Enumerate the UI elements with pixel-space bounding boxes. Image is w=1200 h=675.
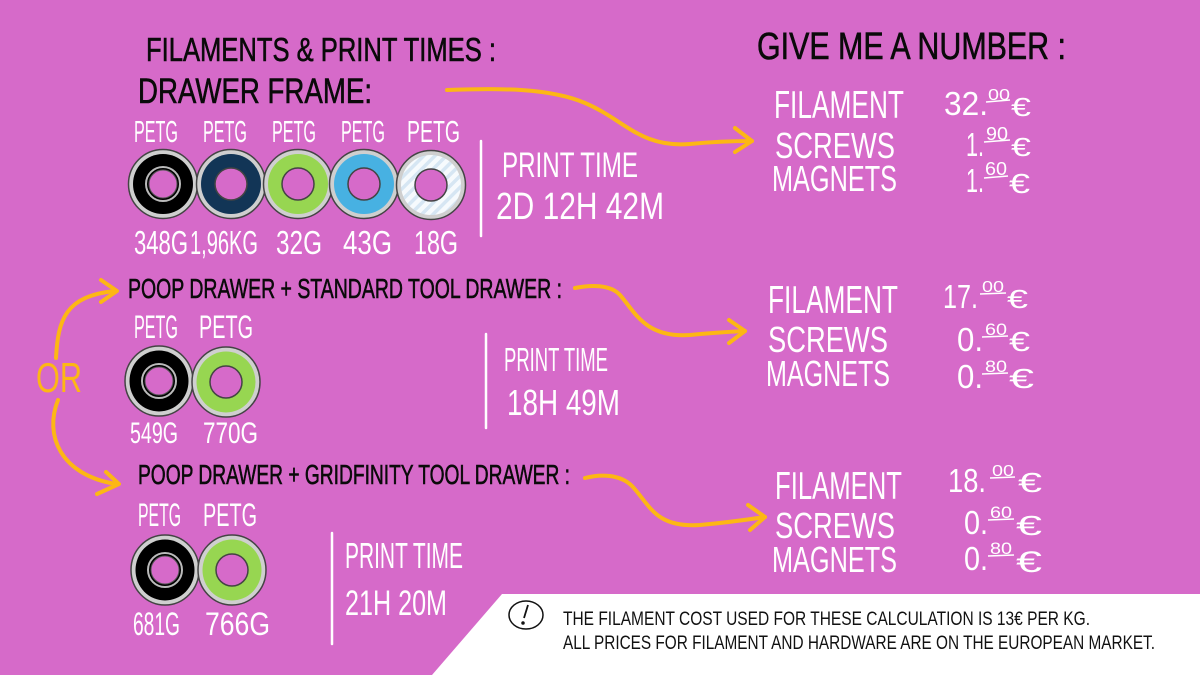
cost values [943,278,1035,395]
arrow: gridfinity drawer to costs [585,476,765,530]
cost values: 60 [985,159,1007,179]
print time: 2D 12H 42M [496,186,664,228]
print time: PRINT TIME [504,341,608,378]
filament spools [131,535,266,605]
panel: standard tool drawer [125,273,620,450]
cost values: € [1011,92,1032,122]
cost values: 17. [943,278,978,315]
divider [331,533,333,644]
filament weights: 681G [133,606,180,642]
OR choice [36,280,119,494]
arrow: to gridfinity tool drawer [53,400,119,494]
print time: PRINT TIME [345,535,463,576]
material labels: PETG [203,497,257,533]
cost values: € [1009,363,1035,394]
cost values: 00 [988,87,1010,104]
cost values: 00 [992,463,1014,480]
material labels: PETG [272,114,316,149]
cost values: 0. [957,358,983,395]
cost values: € [1016,510,1043,541]
material labels [134,114,460,149]
material labels: PETG [203,114,247,149]
cost labels: SCREWS [775,125,895,166]
cost labels: MAGNETS [766,353,890,394]
cost values: € [1009,326,1031,357]
filament weights: 18G [414,224,458,261]
filament spools [128,150,466,220]
heading: standard tool drawer: POOP DRAWER + STANDARD TOOL DRAWER : [128,273,562,304]
print time [345,535,463,623]
cost labels [766,279,898,394]
filament weights: 43G [343,224,392,261]
cost values: 00 [982,279,1004,296]
panel: drawer frame [128,72,664,261]
cost values: 0. [964,540,988,577]
panel: standard drawer costs [766,278,1035,395]
cost labels: FILAMENT [768,279,898,322]
filament weights [133,606,270,642]
divider [485,334,487,428]
cost values: € [1011,132,1032,162]
cost labels: FILAMENT [775,465,902,508]
cost labels [772,84,904,199]
filament spools [125,346,260,417]
cost values: 1. [966,162,984,199]
footnote text: THE FILAMENT COST USED FOR THESE CALCULATION IS 13€ PER KG. [563,609,1090,630]
print time: 18H 49M [507,382,620,423]
filament weights: 549G [130,417,178,450]
arrow: to standard tool drawer [56,280,117,358]
heading: gridfinity tool drawer: POOP DRAWER + GRIDFINITY TOOL DRAWER : [138,459,570,490]
print time: PRINT TIME [502,146,638,185]
heading: drawer frame: DRAWER FRAME: [138,72,372,111]
cost values: € [1018,467,1043,498]
material labels: PETG [134,309,178,345]
icon: exclamation mark [509,601,543,629]
material labels: PETG [199,309,253,345]
filament weights: 32G [276,224,322,261]
cost labels: FILAMENT [774,84,904,127]
cost values [944,85,1032,199]
cost values: € [1016,546,1042,579]
cost labels [772,465,902,580]
cost labels: MAGNETS [772,158,897,199]
heading: filaments and print times: FILAMENTS & PRINT TIMES : [146,31,496,68]
filament weights: 348G [134,224,188,261]
divider [480,141,482,236]
arrow: standard drawer to costs [575,286,745,343]
cost values: 80 [990,539,1012,558]
cost values: 1. [966,126,984,163]
cost labels: SCREWS [768,319,888,360]
panel: drawer frame costs [772,84,1032,199]
cost values: 90 [986,124,1008,144]
filament weights [134,224,458,261]
material labels: PETG [407,114,460,149]
panel: gridfinity drawer costs [772,462,1043,580]
cost values: 0. [957,321,983,358]
arrow: drawer frame to costs [447,89,752,152]
label: or: OR [36,354,82,401]
cost values: 32. [944,85,988,122]
cost values: € [1009,168,1031,199]
footnote text [563,609,1155,654]
panel: footnote [432,594,1200,675]
print time [496,146,664,228]
cost values: 80 [985,357,1007,376]
material labels: PETG [341,114,385,149]
cost values: 60 [990,503,1012,522]
cost values [948,462,1043,579]
heading: give me a number: GIVE ME A NUMBER : [757,26,1066,68]
cost values: 0. [964,504,988,541]
cost values: € [1007,284,1029,314]
filament weights [130,417,258,450]
filament weights: 766G [205,606,270,642]
footnote background [432,594,1200,675]
material labels: PETG [138,497,181,533]
cost values: 18. [948,462,986,499]
filament weights: 770G [203,417,258,450]
material labels: PETG [134,114,178,149]
print time [504,341,620,423]
print time: 21H 20M [345,584,447,623]
filament weights: 1,96KG [190,224,258,261]
cost values: 60 [985,320,1007,339]
panel: gridfinity tool drawer [131,459,570,644]
cost labels: MAGNETS [772,539,897,580]
cost labels: SCREWS [775,505,895,546]
